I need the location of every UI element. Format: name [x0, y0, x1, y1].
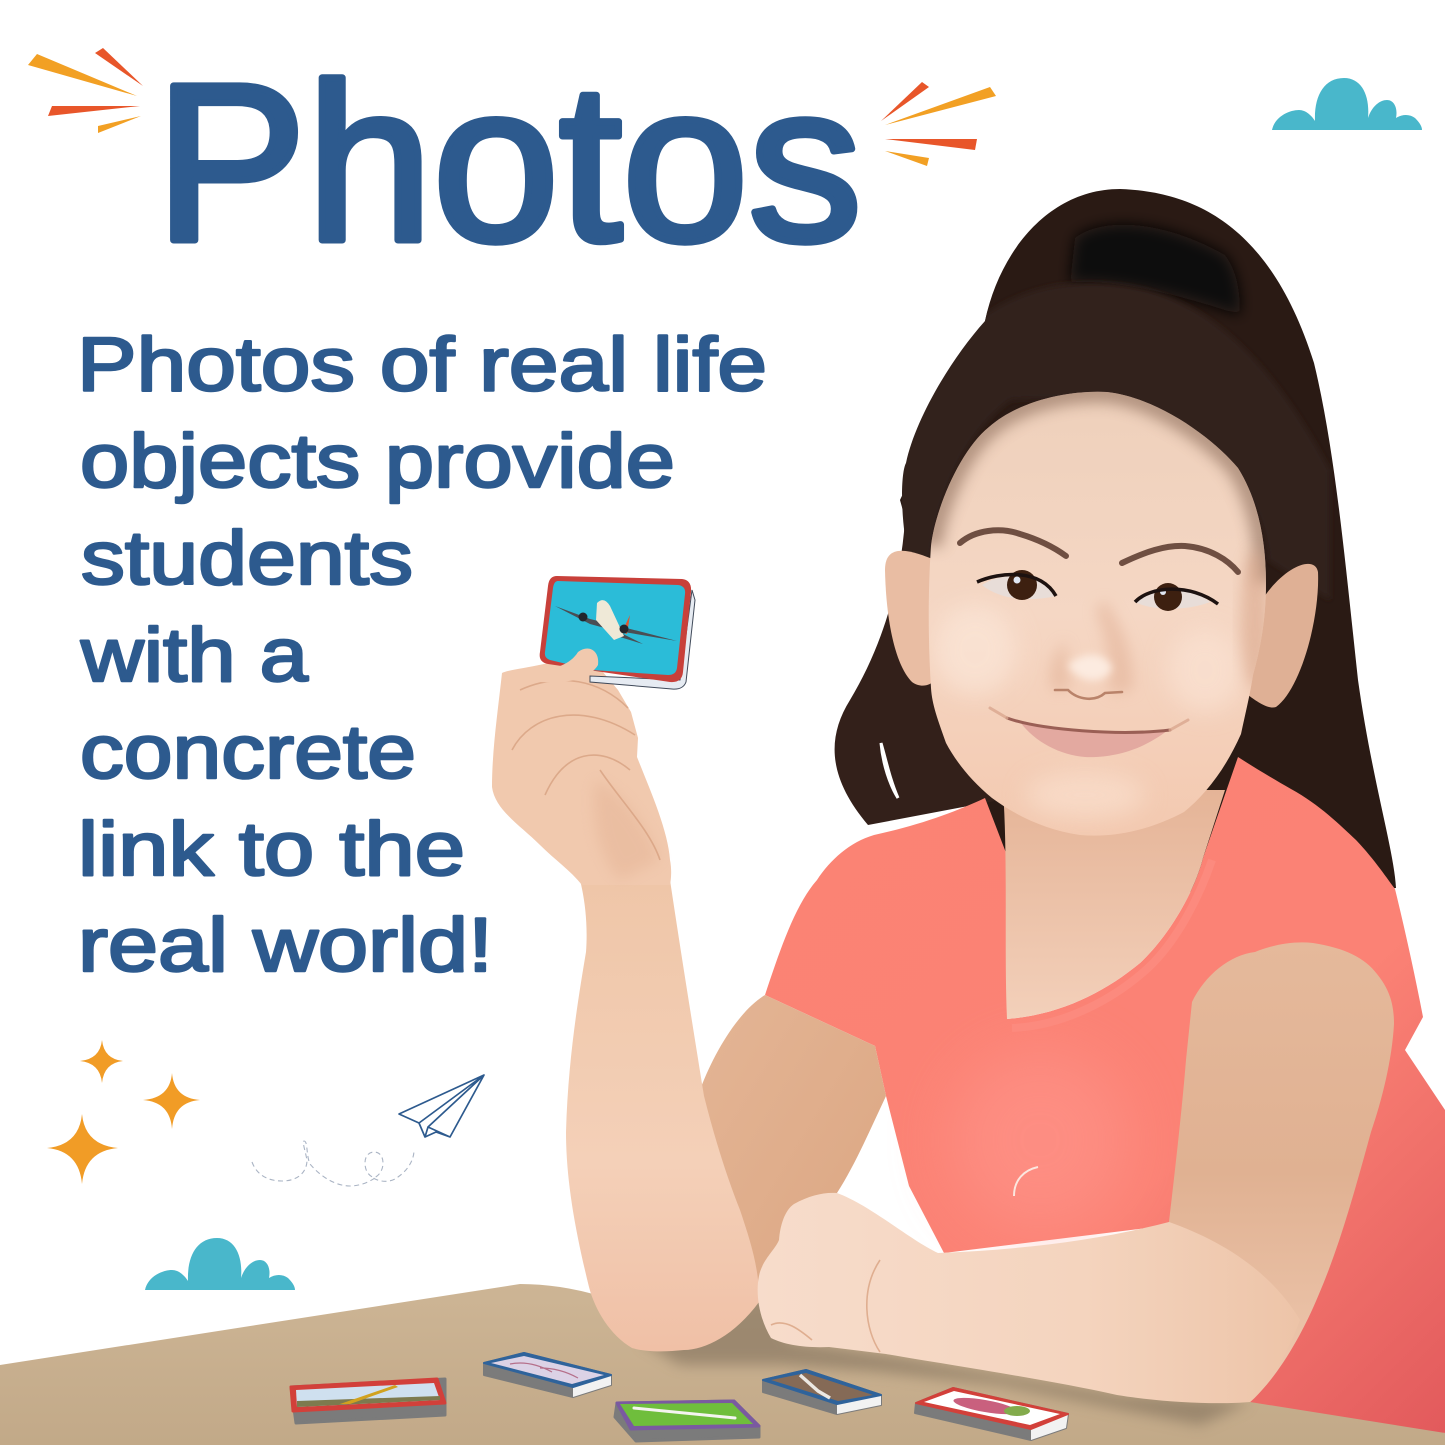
icon: bottom left cloud [145, 1238, 295, 1290]
card: crane photo [291, 1379, 445, 1423]
hairline fade [931, 392, 1266, 583]
body text: concrete [80, 710, 416, 795]
hair back and ponytail [900, 189, 1396, 900]
card face [540, 576, 691, 682]
card: bicycle photo [484, 1353, 611, 1397]
thumb over card [540, 648, 598, 682]
held card with airplane photo [540, 576, 695, 689]
collar band [1012, 860, 1212, 1028]
body text: with a [80, 613, 309, 698]
hand holding card [492, 649, 671, 885]
body text [77, 322, 767, 988]
hand finger creases [512, 680, 660, 860]
photo: girl holding a card [492, 189, 1445, 1433]
white gap in hair lock [881, 743, 898, 798]
smile [1020, 722, 1168, 757]
eyebrows [960, 530, 1066, 556]
left eye [977, 570, 1056, 600]
body text: real world! [78, 903, 493, 988]
body text: Photos of real life [77, 322, 767, 408]
neck [1003, 790, 1225, 1019]
left forearm and elbow [566, 880, 759, 1351]
smile lines [990, 708, 1188, 730]
shirt [765, 757, 1445, 1433]
table [0, 1284, 1445, 1445]
icon: right title sparks [881, 82, 996, 166]
body text: link to the [78, 807, 465, 892]
body text: students [81, 516, 413, 601]
nose shading [1050, 600, 1133, 695]
upper left arm [700, 995, 886, 1302]
face soft shading [931, 392, 1269, 819]
icon: paper plane with dashed trail [252, 1075, 484, 1186]
temple shadow [1241, 550, 1269, 690]
table shadow under arms [640, 1290, 1250, 1425]
title: Photos [155, 38, 862, 288]
icon: left title sparks [28, 48, 143, 133]
shirt sparkle mark [1014, 1167, 1038, 1196]
icon: top right cloud [1272, 78, 1422, 130]
right ear [1248, 564, 1318, 708]
body text: objects provide [80, 419, 675, 504]
front hair band [870, 283, 1330, 600]
card: knife photo [763, 1370, 881, 1414]
shirt light centre [950, 1050, 1130, 1230]
chin light [1025, 771, 1145, 819]
right cheek [1170, 636, 1240, 710]
fist creases [771, 1260, 880, 1352]
right eye [1135, 583, 1218, 611]
card: wrench photo [615, 1401, 759, 1441]
ponytail band [1070, 225, 1240, 315]
icon: orange sparkle stars [47, 1040, 200, 1184]
hair left lock [835, 520, 1000, 825]
airplane [555, 600, 677, 644]
nose highlight [1068, 655, 1112, 680]
left cheek [933, 605, 1017, 695]
card edge [590, 590, 695, 689]
face [929, 392, 1266, 836]
card: grapes photo [915, 1388, 1068, 1440]
left ear [885, 551, 935, 686]
nostrils [1055, 690, 1122, 699]
upper right arm [1169, 942, 1394, 1402]
hand lower shading [594, 780, 660, 880]
forearm and fist [758, 1193, 1300, 1403]
